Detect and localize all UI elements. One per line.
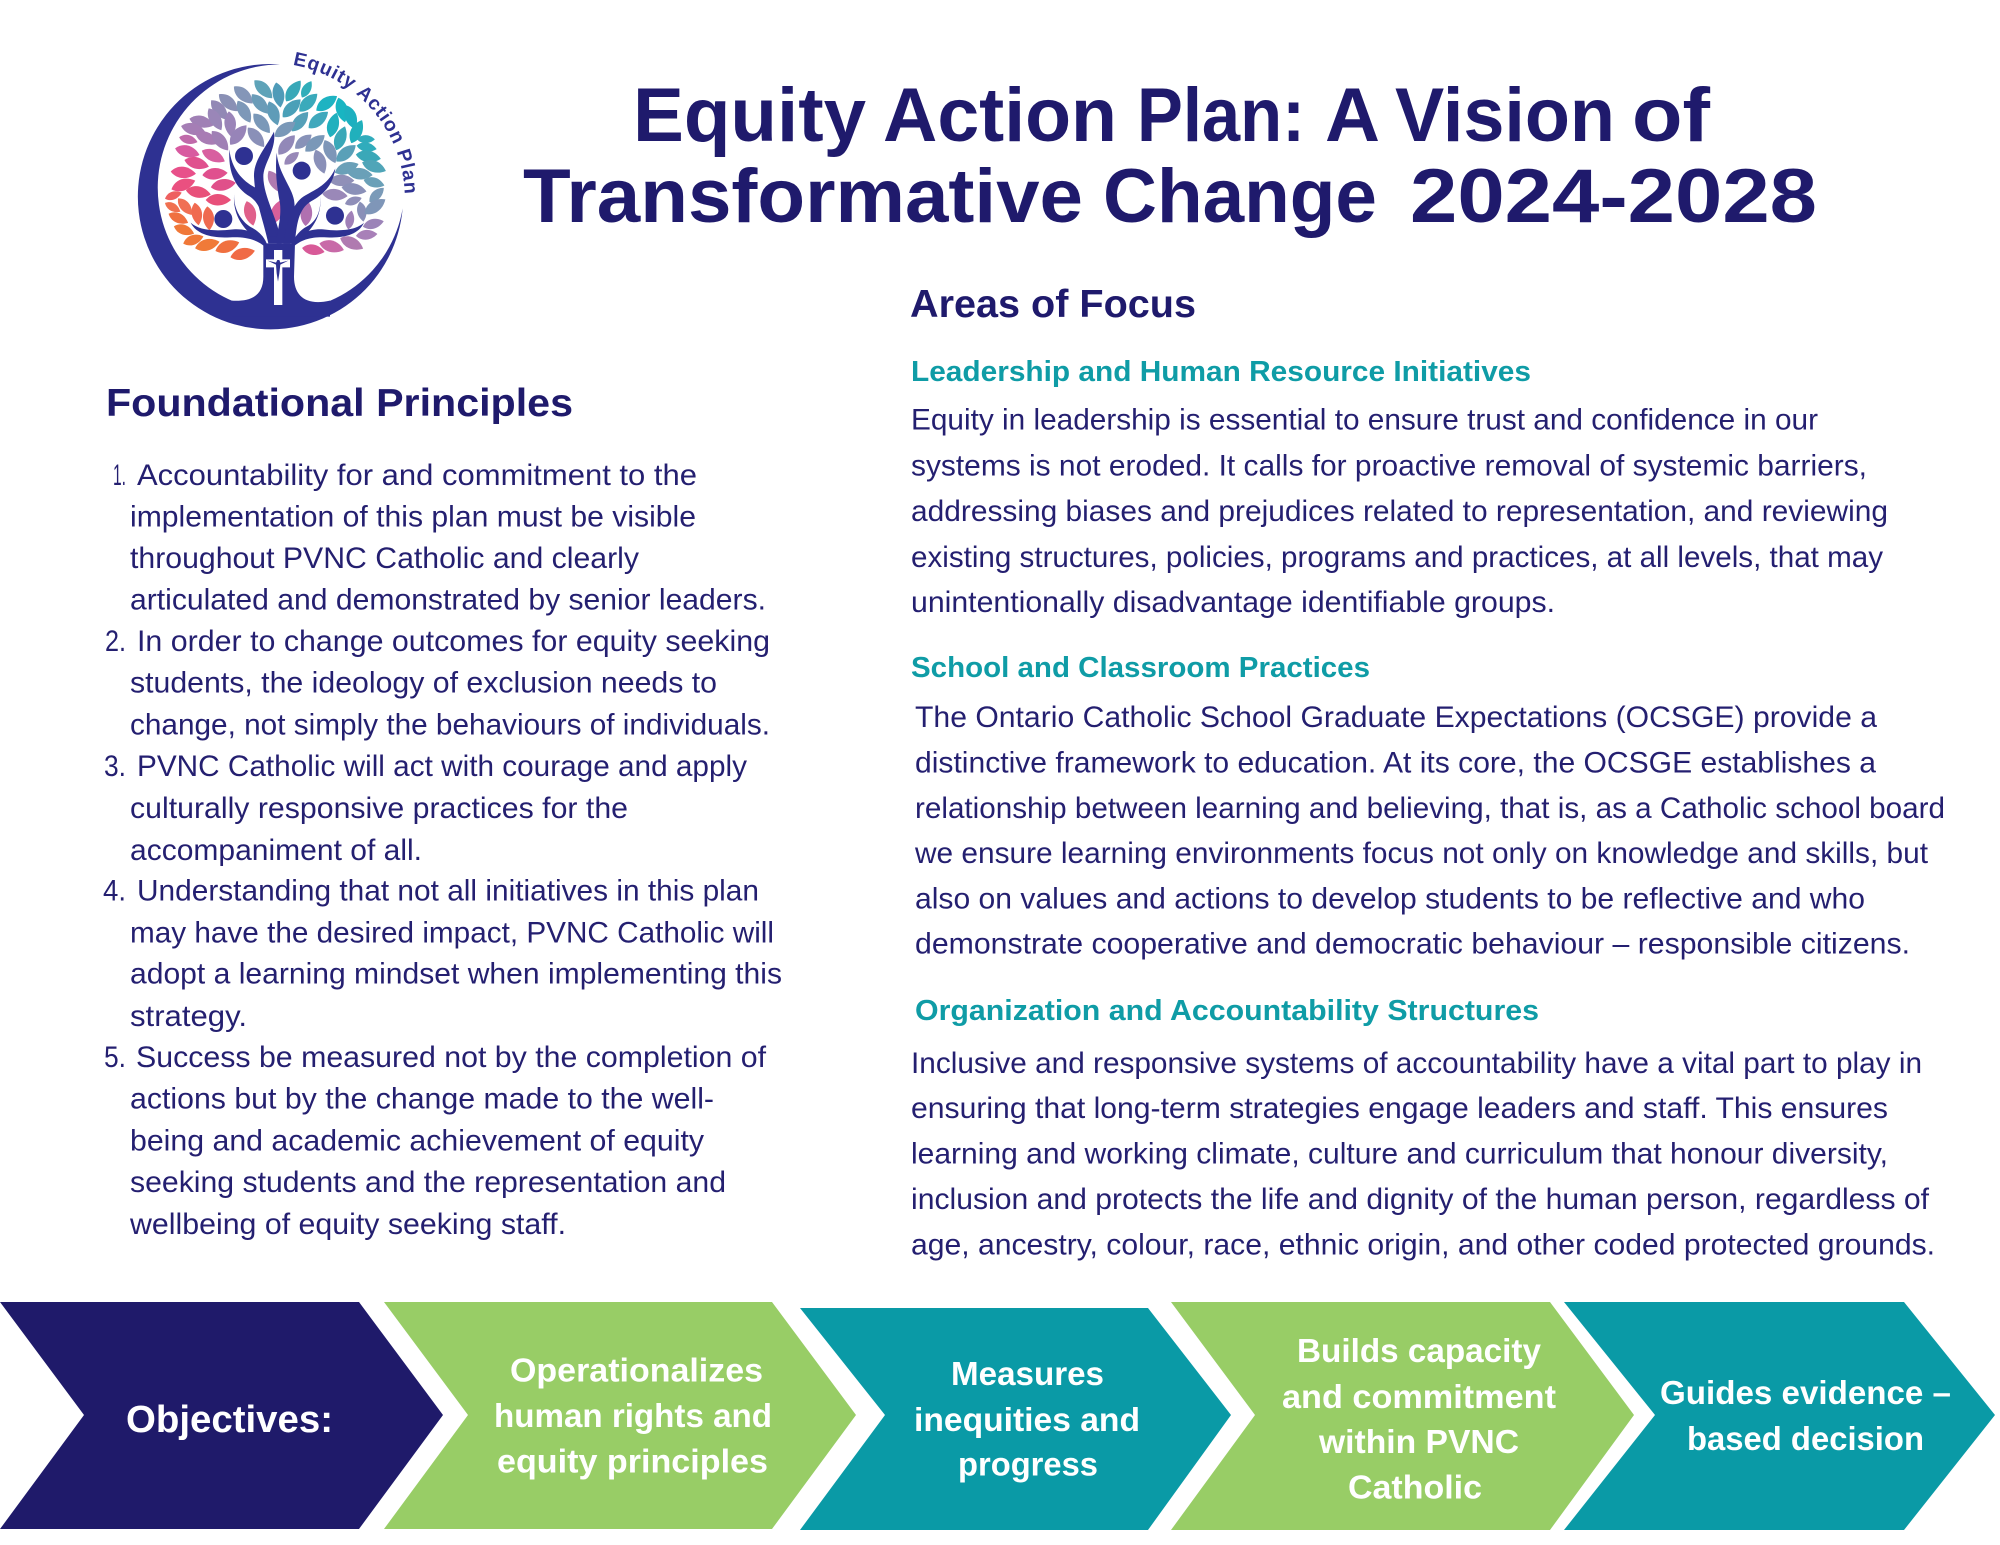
text block: accountability structures — [911, 1047, 1935, 1262]
subheading: leadership: Leadership and Human Resource Initiatives — [911, 356, 1531, 388]
principle 1 — [113, 459, 766, 616]
arrow: measures: inequities and — [914, 1401, 1140, 1438]
principle 1: 1. — [113, 459, 126, 492]
text block: classroom practices — [914, 701, 1945, 960]
logo curved title: Equity Action Plan — [294, 52, 416, 193]
principle 4: may have the desired impact, PVNC Catholic will — [130, 916, 774, 950]
arrow: builds capacity: Builds capacity — [1297, 1332, 1542, 1369]
principle 3: culturally responsive practices for the — [130, 792, 628, 825]
text block: accountability structures: learning and working climate, culture and curriculum that honour diversity, — [911, 1138, 1888, 1170]
arrow: objectives: Objectives: — [126, 1399, 333, 1441]
subheading: classroom practices: School and Classroom Practices — [911, 652, 1370, 684]
logo ring crescent — [138, 64, 403, 329]
logo cross with figure — [266, 250, 290, 305]
arrow: builds capacity: Catholic — [1348, 1468, 1482, 1506]
principle 3: accompaniment of all. — [130, 834, 422, 867]
principle 2 — [105, 625, 770, 742]
principle 3: 3. — [104, 750, 126, 783]
arrow: operationalizes: Operationalizes — [510, 1352, 763, 1388]
principle 1: articulated and demonstrated by senior leaders. — [130, 584, 766, 616]
principle 5: Success be measured not by the completion of — [136, 1041, 767, 1074]
principle 5: 5. — [104, 1041, 126, 1074]
title: Plan: — [1137, 73, 1305, 158]
principle 4: Understanding that not all initiatives in this plan — [137, 874, 759, 908]
arrow: guides evidence — [1564, 1302, 1995, 1530]
text block: classroom practices: also on values and actions to develop students to be reflective and who — [915, 882, 1865, 916]
principle 3 — [104, 750, 747, 867]
title: Action — [883, 73, 1117, 158]
logo tree trunk and branches — [191, 132, 364, 317]
text block: classroom practices: relationship between learning and believing, that is, as a Catholic school board — [915, 792, 1945, 825]
text block: classroom practices: demonstrate cooperative and democratic behaviour – responsible citizens. — [915, 928, 1910, 960]
arrow: operationalizes — [384, 1302, 856, 1529]
text block: classroom practices: distinctive framework to education. At its core, the OCSGE establishes a — [915, 746, 1876, 780]
arrow: guides evidence: based decision — [1687, 1420, 1924, 1457]
heading: foundational principles: Foundational Principles — [106, 382, 573, 425]
arrow: objectives — [0, 1302, 443, 1529]
principle 1: Accountability for and commitment to the — [137, 459, 697, 492]
arrow: builds capacity — [1171, 1302, 1634, 1530]
arrow: builds capacity: and commitment — [1282, 1378, 1556, 1415]
principle 2: In order to change outcomes for equity seeking — [137, 625, 770, 658]
principle 1: implementation of this plan must be visible — [130, 500, 696, 534]
arrow: operationalizes: equity principles — [497, 1442, 768, 1480]
principle 3: PVNC Catholic will act with courage and apply — [137, 750, 747, 783]
text block: leadership — [911, 404, 1888, 619]
subheading: accountability structures: Organization and Accountability Structures — [915, 995, 1539, 1027]
panel: areas of focus — [910, 283, 1945, 1262]
text block: leadership: existing structures, policies, programs and practices, at all levels, that may — [911, 541, 1883, 574]
logo leaves — [163, 76, 389, 263]
section: leadership — [911, 356, 1888, 619]
principle 5: seeking students and the representation and — [130, 1166, 726, 1199]
heading: areas of focus: Areas of Focus — [910, 283, 1196, 326]
principle 5 — [104, 1041, 767, 1241]
text block: accountability structures: Inclusive and responsive systems of accountability have a vital part to play in — [911, 1047, 1922, 1080]
principle 4: 4. — [103, 874, 126, 908]
arrow: builds capacity: within PVNC — [1318, 1423, 1519, 1460]
principle 4 — [103, 874, 782, 1033]
text block: leadership: systems is not eroded. It calls for proactive removal of systemic barriers, — [911, 450, 1867, 482]
title — [523, 73, 1817, 239]
text block: classroom practices: we ensure learning environments focus not only on knowledge and skills, but — [914, 837, 1929, 870]
principle 5: wellbeing of equity seeking staff. — [129, 1208, 566, 1241]
text block: accountability structures: ensuring that long-term strategies engage leaders and staff. This ensures — [911, 1092, 1888, 1125]
text block: leadership: unintentionally disadvantage identifiable groups. — [911, 586, 1555, 619]
principle 5: actions but by the change made to the well- — [130, 1082, 714, 1116]
principle 2: students, the ideology of exclusion needs to — [130, 666, 717, 700]
text block: classroom practices: The Ontario Catholic School Graduate Expectations (OCSGE) provide a — [915, 701, 1877, 734]
objectives arrow band — [0, 1302, 1995, 1530]
title: Change — [1103, 154, 1377, 239]
arrow: measures: Measures — [951, 1355, 1104, 1392]
title: A — [1325, 73, 1380, 158]
principle 4: strategy. — [130, 1000, 247, 1033]
title: Transformative — [523, 154, 1083, 239]
title: of — [1632, 73, 1711, 158]
text block: accountability structures: inclusion and protects the life and dignity of the human person, regardless of — [911, 1183, 1930, 1216]
principle 1: throughout PVNC Catholic and clearly — [130, 542, 639, 575]
text block: leadership: addressing biases and prejudices related to representation, and reviewing — [911, 495, 1888, 528]
principle 5: being and academic achievement of equity — [130, 1124, 704, 1158]
title: Equity — [633, 73, 866, 158]
text block: accountability structures: age, ancestry, colour, race, ethnic origin, and other coded protected grounds. — [911, 1228, 1935, 1262]
logo: equity action plan tree — [138, 52, 416, 330]
arrow: measures — [800, 1308, 1231, 1530]
title: 2024-2028 — [1410, 154, 1817, 239]
panel: foundational principles — [103, 382, 782, 1241]
text block: leadership: Equity in leadership is essential to ensure trust and confidence in our — [911, 404, 1818, 436]
section: accountability structures — [911, 995, 1935, 1262]
arrow: operationalizes: human rights and — [494, 1397, 772, 1434]
title: Vision — [1395, 73, 1615, 158]
principle 2: 2. — [105, 625, 126, 658]
arrow: guides evidence: Guides evidence – — [1660, 1374, 1951, 1411]
principle 4: adopt a learning mindset when implementing this — [130, 958, 782, 990]
arrow: measures: progress — [958, 1446, 1098, 1482]
section: classroom practices — [911, 652, 1945, 960]
principle 2: change, not simply the behaviours of individuals. — [130, 708, 770, 742]
